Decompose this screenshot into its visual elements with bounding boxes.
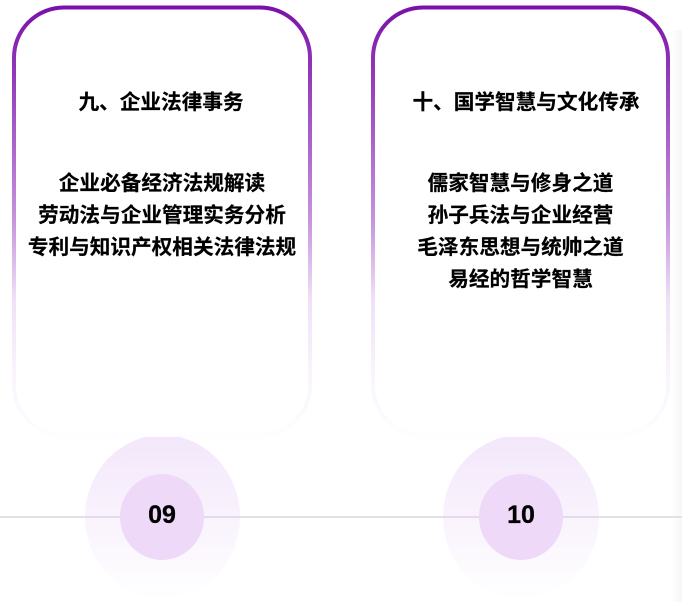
- panel: card nine: [12, 6, 312, 560]
- text block: card ten topics: 孙子兵法与企业经营: [428, 204, 613, 227]
- panel: card ten: [371, 6, 670, 560]
- outer circle: [85, 435, 240, 599]
- outer circle: [443, 435, 599, 599]
- heading: card nine: 九、企业法律事务: [78, 91, 244, 114]
- card ten gradient border: [371, 6, 670, 394]
- text block: card ten topics: 易经的哲学智慧: [448, 268, 593, 291]
- text block: card nine topics: 专利与知识产权相关法律法规: [28, 236, 296, 259]
- text block: card ten topics: 毛泽东思想与统帅之道: [417, 236, 624, 259]
- text block: card nine topics: 劳动法与企业管理实务分析: [38, 204, 286, 227]
- card nine gradient border: [12, 6, 312, 394]
- number: 09: [148, 501, 176, 529]
- text block: card ten topics: 儒家智慧与修身之道: [428, 172, 613, 195]
- inner circle: [120, 474, 204, 560]
- text block: card ten topics: [417, 172, 624, 291]
- badge: 10: [443, 437, 599, 560]
- text block: card nine topics: [28, 172, 296, 259]
- timeline line: [0, 516, 682, 518]
- number: 10: [507, 501, 535, 529]
- heading: card ten: 十、国学智慧与文化传承: [412, 91, 640, 114]
- inner circle: [479, 474, 563, 560]
- badge: 09: [85, 437, 240, 560]
- text block: card nine topics: 企业必备经济法规解读: [59, 172, 265, 195]
- right edge shadow of next card: [670, 30, 682, 602]
